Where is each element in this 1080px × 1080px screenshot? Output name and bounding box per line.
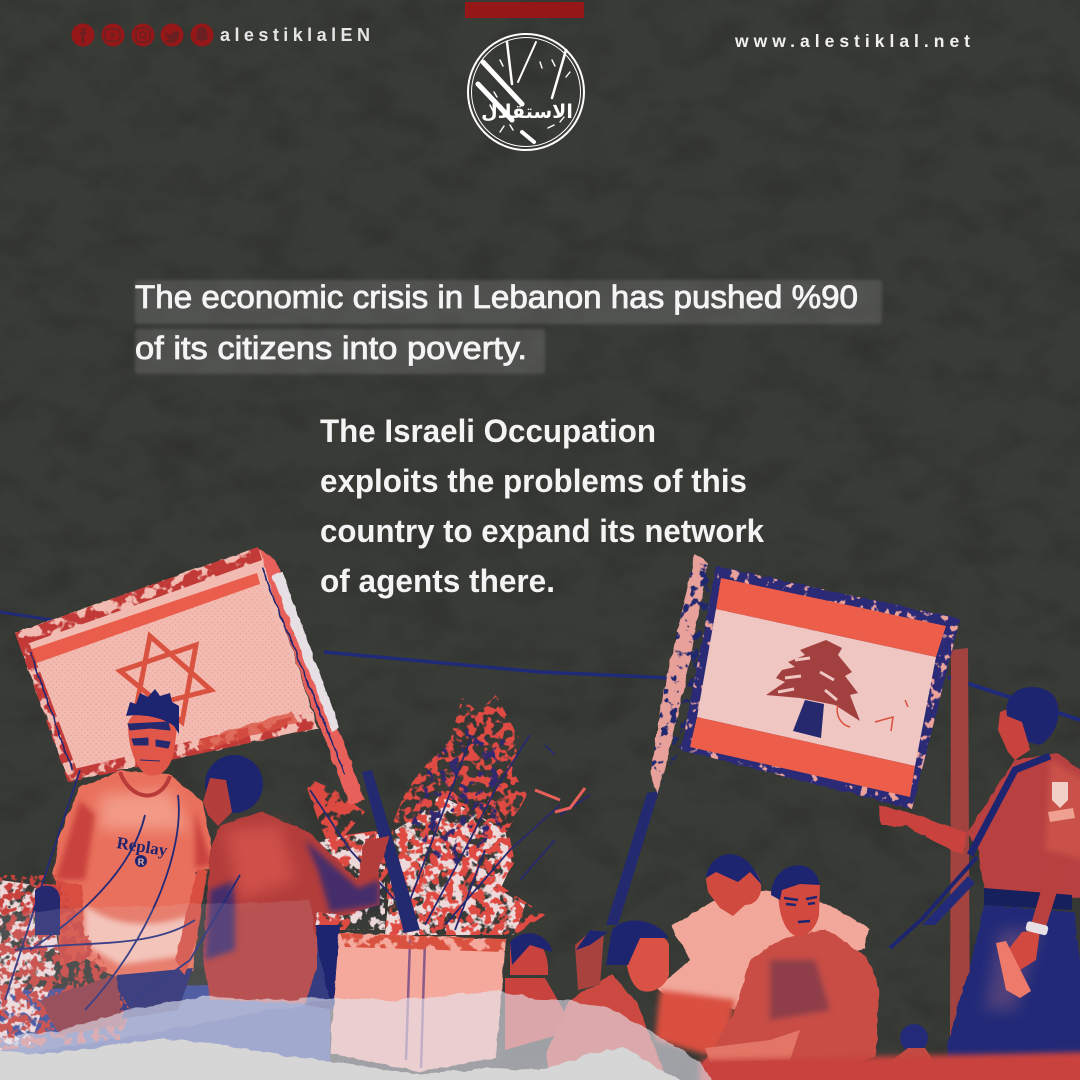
Replay logo: Replay — [115, 833, 169, 860]
sweatshirt shadows — [55, 800, 212, 880]
social handle: alestiklalEN — [220, 25, 370, 45]
flag bottom red band — [690, 717, 915, 797]
rust edge of flag — [15, 547, 318, 782]
Lebanese flag on a pole — [606, 554, 960, 925]
cedar gaps — [778, 658, 837, 700]
frayed left post — [650, 554, 708, 793]
cedar trunk — [793, 700, 824, 738]
highlight strip line 2 — [135, 329, 545, 374]
flag blue stripe (duotone red) — [29, 573, 260, 664]
jacket shadows — [205, 840, 379, 960]
torn gray paper — [0, 1038, 710, 1080]
icon: youtube — [102, 24, 124, 46]
icon: instagram — [132, 24, 154, 46]
wires — [0, 612, 1080, 720]
face — [778, 882, 820, 936]
highlight strip line 1 — [135, 280, 882, 324]
collar — [120, 772, 170, 796]
flag white band — [697, 609, 936, 766]
hair — [1006, 687, 1059, 745]
headline line 2: of its citizens into poverty. — [135, 330, 527, 366]
raised arm — [879, 805, 967, 855]
navy edge of flag — [30, 568, 345, 775]
branches — [5, 770, 240, 1010]
photo base under torn paper — [0, 985, 330, 1080]
rifle strap — [970, 756, 1050, 855]
dark foliage — [40, 975, 125, 1035]
website address: www.alestiklal.net — [734, 31, 970, 51]
watch — [1025, 921, 1049, 936]
logo: Al-Estiklal calligraphy seal: الاستقلال — [481, 101, 573, 123]
belt — [984, 888, 1072, 910]
red band along the bottom edge of photo — [700, 1052, 1080, 1080]
icon: facebook: f — [80, 26, 87, 48]
shoulder shade — [655, 990, 735, 1060]
small twig ends — [535, 788, 585, 812]
sweatshirt highlights — [85, 905, 190, 965]
hidden head behind man — [35, 886, 60, 935]
jacket — [203, 812, 389, 1003]
hair — [706, 854, 762, 885]
red speckled crown — [385, 695, 545, 935]
shoulder — [505, 978, 575, 1050]
flag pole lower — [362, 770, 420, 933]
flag staining — [198, 712, 298, 752]
hand — [1008, 930, 1040, 970]
cedar tree — [766, 640, 860, 738]
hair — [771, 865, 820, 900]
eyes and brows — [784, 897, 817, 922]
hair — [606, 921, 669, 965]
jeans — [115, 968, 193, 1020]
box seams — [406, 940, 425, 1068]
seated man in dark sweater — [702, 865, 879, 1066]
folded hands — [705, 1030, 800, 1062]
seated man in foreground left — [547, 921, 670, 1080]
pale bush speckle — [0, 880, 60, 1050]
pole upper with rust — [258, 548, 365, 806]
faint translucent paper — [0, 900, 330, 1060]
body text block: of agents there. — [320, 563, 555, 599]
neck and face — [128, 710, 177, 776]
flag frame — [681, 566, 960, 809]
branches — [310, 735, 590, 930]
red top bar — [465, 2, 584, 18]
box rust — [340, 933, 506, 952]
rifle body — [922, 876, 975, 925]
brows and eyes — [128, 722, 170, 761]
wooden pole behind Lebanese flag — [950, 648, 970, 1040]
pale speckled lower foliage — [385, 795, 525, 935]
neck and face — [998, 705, 1030, 760]
shirt shading — [1045, 760, 1080, 860]
head in far left of the group — [505, 933, 575, 1050]
cedar foliage — [766, 640, 860, 721]
rifle — [890, 857, 977, 948]
insignia — [1048, 782, 1075, 822]
translucent torn paper — [0, 990, 730, 1080]
box face — [330, 933, 506, 1072]
shirt — [967, 753, 1080, 898]
left foliage speckle — [303, 776, 390, 930]
icon: snapchat — [190, 24, 214, 46]
registered mark — [135, 855, 147, 867]
social media icons — [72, 24, 214, 48]
headline line 1: The economic crisis in Lebanon has pushed %90 — [135, 279, 858, 315]
body text block: exploits the problems of this — [320, 463, 747, 499]
star of David — [120, 636, 211, 722]
halftone overlay — [30, 573, 312, 770]
foreground bush and barbed wire — [0, 770, 240, 1050]
soldier holding Lebanese flag — [879, 687, 1080, 1080]
tree branches and blossom — [303, 695, 590, 935]
post speckle — [650, 554, 716, 793]
flag scratches — [837, 700, 908, 731]
face — [203, 778, 232, 826]
left pale speckle — [312, 830, 385, 930]
head — [706, 858, 761, 916]
pale pole strip — [272, 572, 340, 732]
flag frame — [15, 547, 318, 781]
jacket fold — [225, 825, 295, 900]
hair — [126, 689, 179, 734]
body text block: country to expand its network — [320, 513, 764, 549]
logo: Al-Estiklal calligraphy seal — [468, 34, 584, 150]
small background man — [885, 1024, 940, 1080]
sweater shading — [770, 960, 830, 1020]
icon: twitter — [160, 24, 184, 46]
background man — [575, 930, 604, 990]
body text block: The Israeli Occupation — [320, 413, 656, 449]
skin and hair — [510, 936, 548, 975]
seated man in white t-shirt — [655, 854, 869, 1060]
registered mark: R — [138, 857, 145, 867]
man in sweatshirt — [53, 689, 215, 1020]
trouser highlights — [985, 930, 1040, 1010]
trousers — [945, 905, 1080, 1080]
forearm — [1030, 860, 1067, 930]
sweater — [702, 929, 879, 1066]
broken box at the base of the pole — [330, 933, 506, 1072]
navy speckled crown — [410, 715, 510, 870]
head — [205, 755, 263, 813]
jacket — [547, 974, 670, 1080]
icon: facebook — [72, 24, 94, 48]
background man hair — [576, 930, 608, 950]
man seen from behind holding the pole — [203, 755, 389, 1003]
lower pole — [606, 791, 659, 925]
headline text with highlighter — [135, 279, 882, 374]
flag top red band — [716, 578, 946, 657]
sweatshirt — [53, 771, 215, 977]
face — [625, 934, 669, 992]
dark gap beside box — [305, 925, 340, 1010]
flag frame rust — [681, 566, 960, 809]
chest highlight — [100, 790, 190, 830]
Israeli flag on a pole — [15, 547, 420, 933]
body text block — [320, 413, 764, 599]
bush red speckle — [0, 875, 130, 1050]
white shirt — [657, 891, 869, 1010]
hanging arms — [55, 870, 207, 975]
bottle — [996, 941, 1031, 998]
